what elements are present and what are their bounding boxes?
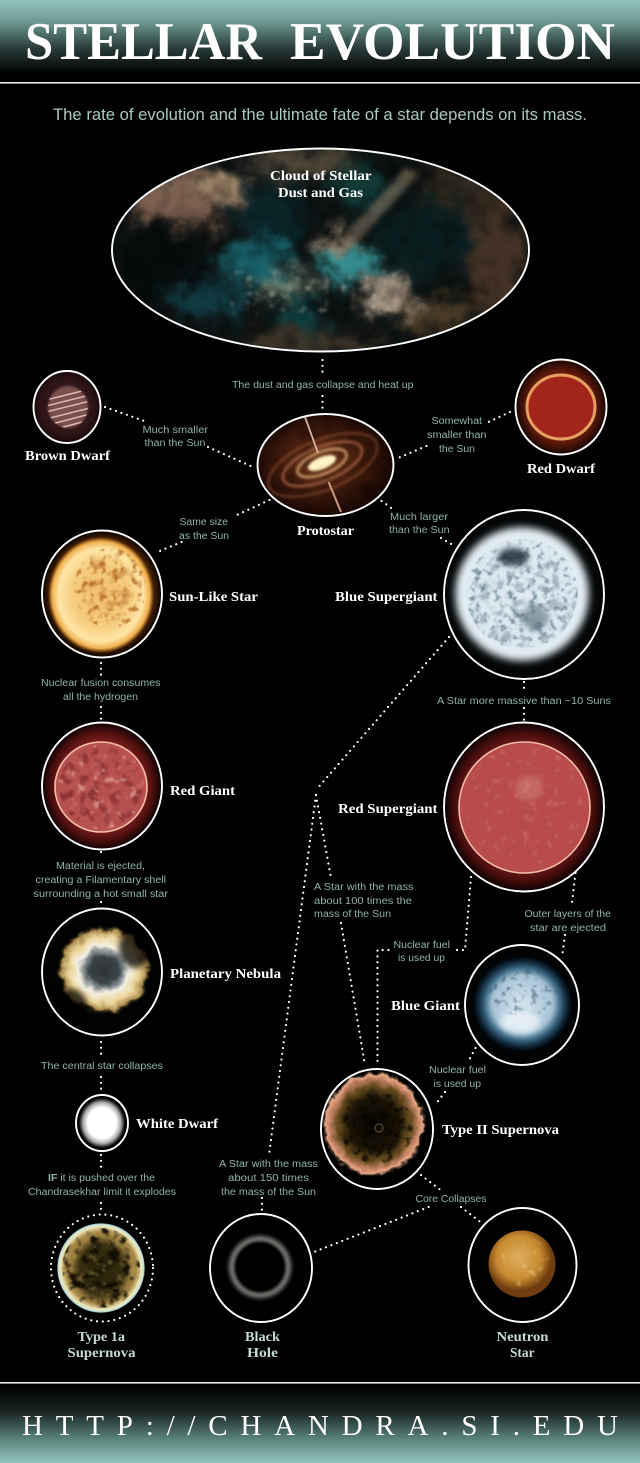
label: black hole bbox=[245, 1329, 281, 1360]
caption: chandrasekhar limit bbox=[28, 1173, 176, 1198]
caption: much larger: Much larger bbox=[390, 512, 449, 523]
caption: nuclear fuel 1: Nuclear fuel bbox=[394, 940, 450, 951]
caption: much smaller: than the Sun bbox=[144, 438, 206, 449]
label: black hole: Black bbox=[245, 1329, 281, 1344]
label: black hole: Hole bbox=[247, 1345, 278, 1360]
dotted connector lines bbox=[101, 360, 576, 1252]
caption: outer layers: Outer layers of the bbox=[524, 909, 611, 920]
caption: chandrasekhar limit: Chandrasekhar limit it explodes bbox=[28, 1187, 176, 1198]
star: black hole bbox=[210, 1214, 312, 1360]
label: red supergiant: Red Supergiant bbox=[338, 801, 438, 816]
caption: much smaller: Much smaller bbox=[142, 425, 209, 436]
star: type 1a supernova bbox=[51, 1214, 153, 1360]
star: protostar bbox=[257, 414, 394, 538]
star: white dwarf bbox=[76, 1095, 219, 1151]
caption: material ejected: surrounding a hot small star bbox=[34, 889, 169, 900]
caption: nuclear fuel 2: Nuclear fuel bbox=[429, 1065, 486, 1076]
caption: core collapses: Core Collapses bbox=[416, 1194, 486, 1205]
caption: 100 times mass: about 100 times the bbox=[314, 896, 412, 907]
label: type 1a supernova: Type 1a bbox=[78, 1329, 125, 1344]
caption: 150 times mass: about 150 times bbox=[228, 1173, 309, 1184]
label: blue giant: Blue Giant bbox=[391, 998, 461, 1013]
caption: much smaller bbox=[142, 425, 209, 449]
caption: same size bbox=[179, 517, 229, 542]
footer band bbox=[0, 1382, 640, 1463]
label: sun-like star: Sun-Like Star bbox=[169, 589, 258, 604]
star: neutron star bbox=[468, 1208, 576, 1360]
caption: dust and gas collapse: The dust and gas collapse and heat up bbox=[232, 380, 414, 391]
caption: 150 times mass bbox=[219, 1159, 318, 1198]
label: type 1a supernova: Supernova bbox=[68, 1345, 136, 1360]
caption: material ejected: Material is ejected, bbox=[56, 861, 145, 872]
caption: 150 times mass: A Star with the mass bbox=[219, 1159, 318, 1170]
caption: nuclear fuel 1: is used up bbox=[398, 953, 445, 964]
caption: chandrasekhar limit: IF it is pushed over the bbox=[48, 1173, 155, 1184]
title: STELLAR bbox=[25, 13, 263, 71]
caption: more massive than 10 suns: A Star more massive than ~10 Suns bbox=[437, 696, 611, 707]
caption: nuclear fusion bbox=[41, 678, 160, 703]
subtitle: The rate of evolution and the ultimate fate of a star depends on its mass. bbox=[53, 106, 587, 124]
star: red giant bbox=[42, 722, 236, 850]
star: blue giant bbox=[391, 945, 579, 1065]
label: neutron star: Star bbox=[510, 1345, 535, 1360]
label: cloud bbox=[270, 168, 372, 200]
title: EVOLUTION bbox=[290, 13, 615, 71]
caption: somewhat smaller: the Sun bbox=[439, 444, 475, 455]
star: red dwarf bbox=[515, 359, 607, 476]
caption: much larger bbox=[389, 512, 450, 536]
label: brown dwarf: Brown Dwarf bbox=[25, 448, 111, 463]
label: neutron star: Neutron bbox=[496, 1329, 549, 1344]
caption: 100 times mass: A Star with the mass bbox=[314, 882, 414, 893]
caption: somewhat smaller: smaller than bbox=[427, 430, 486, 441]
panel: cloud of stellar dust and gas bbox=[110, 144, 530, 359]
caption: nuclear fusion: all the hydrogen bbox=[63, 692, 138, 703]
header band bbox=[0, 0, 640, 84]
label: white dwarf: White Dwarf bbox=[136, 1116, 219, 1131]
caption: somewhat smaller bbox=[427, 416, 486, 455]
star: red supergiant bbox=[338, 722, 604, 892]
star: planetary nebula bbox=[42, 908, 281, 1036]
caption: 100 times mass: mass of the Sun bbox=[314, 909, 391, 920]
caption: 150 times mass: the mass of the Sun bbox=[221, 1187, 316, 1198]
label: cloud: Cloud of Stellar bbox=[270, 168, 372, 183]
caption: same size: as the Sun bbox=[179, 531, 229, 542]
caption: much larger: than the Sun bbox=[389, 525, 450, 536]
star: type II supernova bbox=[321, 1069, 559, 1189]
label: type 1a supernova bbox=[68, 1329, 136, 1360]
label: red dwarf: Red Dwarf bbox=[527, 461, 596, 476]
caption: somewhat smaller: Somewhat bbox=[432, 416, 482, 427]
label: planetary nebula: Planetary Nebula bbox=[170, 966, 281, 981]
caption: nuclear fuel 2 bbox=[429, 1065, 486, 1090]
caption: material ejected bbox=[34, 861, 169, 900]
caption: outer layers: star are ejected bbox=[530, 923, 606, 934]
caption: nuclear fuel 1 bbox=[394, 940, 450, 964]
caption: central star collapses: The central star collapses bbox=[41, 1061, 163, 1072]
footer url: HTTP://CHANDRA.SI.EDU bbox=[22, 1410, 618, 1442]
label: type II supernova: Type II Supernova bbox=[442, 1122, 559, 1137]
title bbox=[25, 13, 615, 71]
label: neutron star bbox=[496, 1329, 549, 1360]
caption: material ejected: creating a Filamentary shell bbox=[36, 875, 166, 886]
star: brown dwarf bbox=[25, 371, 111, 463]
label: cloud: Dust and Gas bbox=[278, 185, 363, 200]
caption: same size: Same size bbox=[180, 517, 228, 528]
caption: nuclear fusion: Nuclear fusion consumes bbox=[41, 678, 160, 689]
label: blue supergiant: Blue Supergiant bbox=[335, 589, 438, 604]
label: protostar: Protostar bbox=[297, 523, 354, 538]
caption: 100 times mass bbox=[314, 882, 414, 920]
star: blue supergiant bbox=[335, 510, 604, 680]
caption: nuclear fuel 2: is used up bbox=[434, 1079, 481, 1090]
label: red giant: Red Giant bbox=[170, 783, 236, 798]
caption: outer layers bbox=[524, 909, 611, 934]
star: sun-like star bbox=[42, 530, 258, 658]
